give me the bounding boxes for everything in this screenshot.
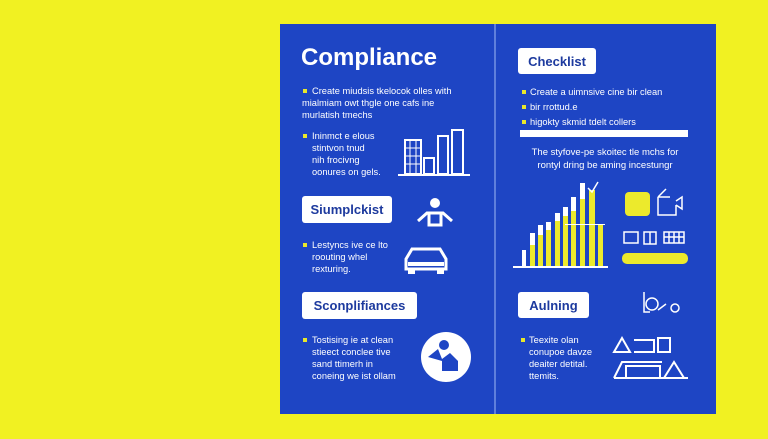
box: Checklist: Checklist bbox=[528, 54, 586, 68]
text block: bullet 1: mialmiam owt thgle one cafs ine bbox=[302, 98, 434, 108]
icon: box outline bbox=[657, 188, 683, 216]
text block: bullet 1: Create miudsis tkelocok olles with bbox=[312, 86, 452, 96]
text block: bullet 3: roouting whel bbox=[312, 252, 367, 262]
text block: checklist bullets: bir rrottud.e bbox=[530, 102, 578, 112]
text block: bullet 2 bbox=[303, 131, 381, 177]
text block: bullet 4: coneing we ist ollam bbox=[312, 371, 396, 381]
text block: checklist bullets: higokty skmid tdelt collers bbox=[530, 117, 636, 127]
text block: bullet 3: Lestyncs ive ce lto bbox=[312, 240, 388, 250]
text block: bullet 4: Tostising ie at clean bbox=[312, 335, 393, 345]
text block: bullet 1 bbox=[302, 86, 452, 120]
text block: bullet 3 bbox=[303, 240, 388, 274]
panel: main blue bbox=[280, 24, 716, 414]
box: Sconplifiances bbox=[302, 292, 417, 319]
text block: centered: rontyl dring be aming incestungr bbox=[537, 160, 673, 171]
text block: bullet 2: stintvon tnud bbox=[312, 143, 365, 153]
text block: bullet 2: oonures on gels. bbox=[312, 167, 381, 177]
title: Compliance bbox=[301, 44, 437, 71]
text block: aulning bullet bbox=[521, 335, 592, 381]
text block: centered bbox=[532, 147, 678, 171]
text block: centered: The styfove-pe skoitec tle mchs for bbox=[532, 147, 678, 158]
text block: checklist bullets: Create a uimnsive cine bir clean bbox=[530, 87, 662, 97]
white bar bbox=[520, 130, 688, 137]
text block: checklist bullets bbox=[522, 87, 662, 127]
chart: yellow bars bbox=[513, 182, 608, 268]
icons: small row bbox=[623, 231, 685, 245]
text block: aulning bullet: Teexite olan bbox=[529, 335, 579, 345]
text block: bullet 4 bbox=[303, 335, 396, 381]
text block: aulning bullet: ttemits. bbox=[529, 371, 559, 381]
box: Checklist bbox=[518, 48, 596, 74]
box: Siumplckist: Siumplckist bbox=[311, 202, 383, 217]
text block: aulning bullet: conupoe davze bbox=[529, 347, 592, 357]
box: Siumplckist bbox=[302, 196, 392, 223]
icon: shapes bbox=[612, 336, 688, 379]
icon: yellow square bbox=[625, 192, 650, 216]
box: Sconplifiances: Sconplifiances bbox=[314, 298, 405, 313]
icon: gear tools bbox=[643, 292, 680, 313]
box: Aulung: Aulning bbox=[529, 298, 578, 312]
icon: bar chart bbox=[398, 129, 470, 176]
divider bbox=[494, 24, 496, 414]
icon: car bbox=[404, 248, 448, 274]
text block: bullet 3: rexturing. bbox=[312, 264, 351, 274]
text block: bullet 1: murlatish tmechs bbox=[302, 110, 372, 120]
text block: bullet 4: sand ttimerh in bbox=[312, 359, 373, 369]
text block: bullet 4: stieect conclee tive bbox=[312, 347, 391, 357]
text block: bullet 2: nih frocivng bbox=[312, 155, 360, 165]
text block: aulning bullet: deaiter detital. bbox=[529, 359, 587, 369]
icon: person bbox=[417, 198, 453, 226]
text block: bullet 2: Ininmct e elous bbox=[312, 131, 375, 141]
icon: circle bbox=[421, 332, 471, 382]
box: Aulung bbox=[518, 292, 589, 318]
yellow pill bbox=[622, 253, 688, 264]
